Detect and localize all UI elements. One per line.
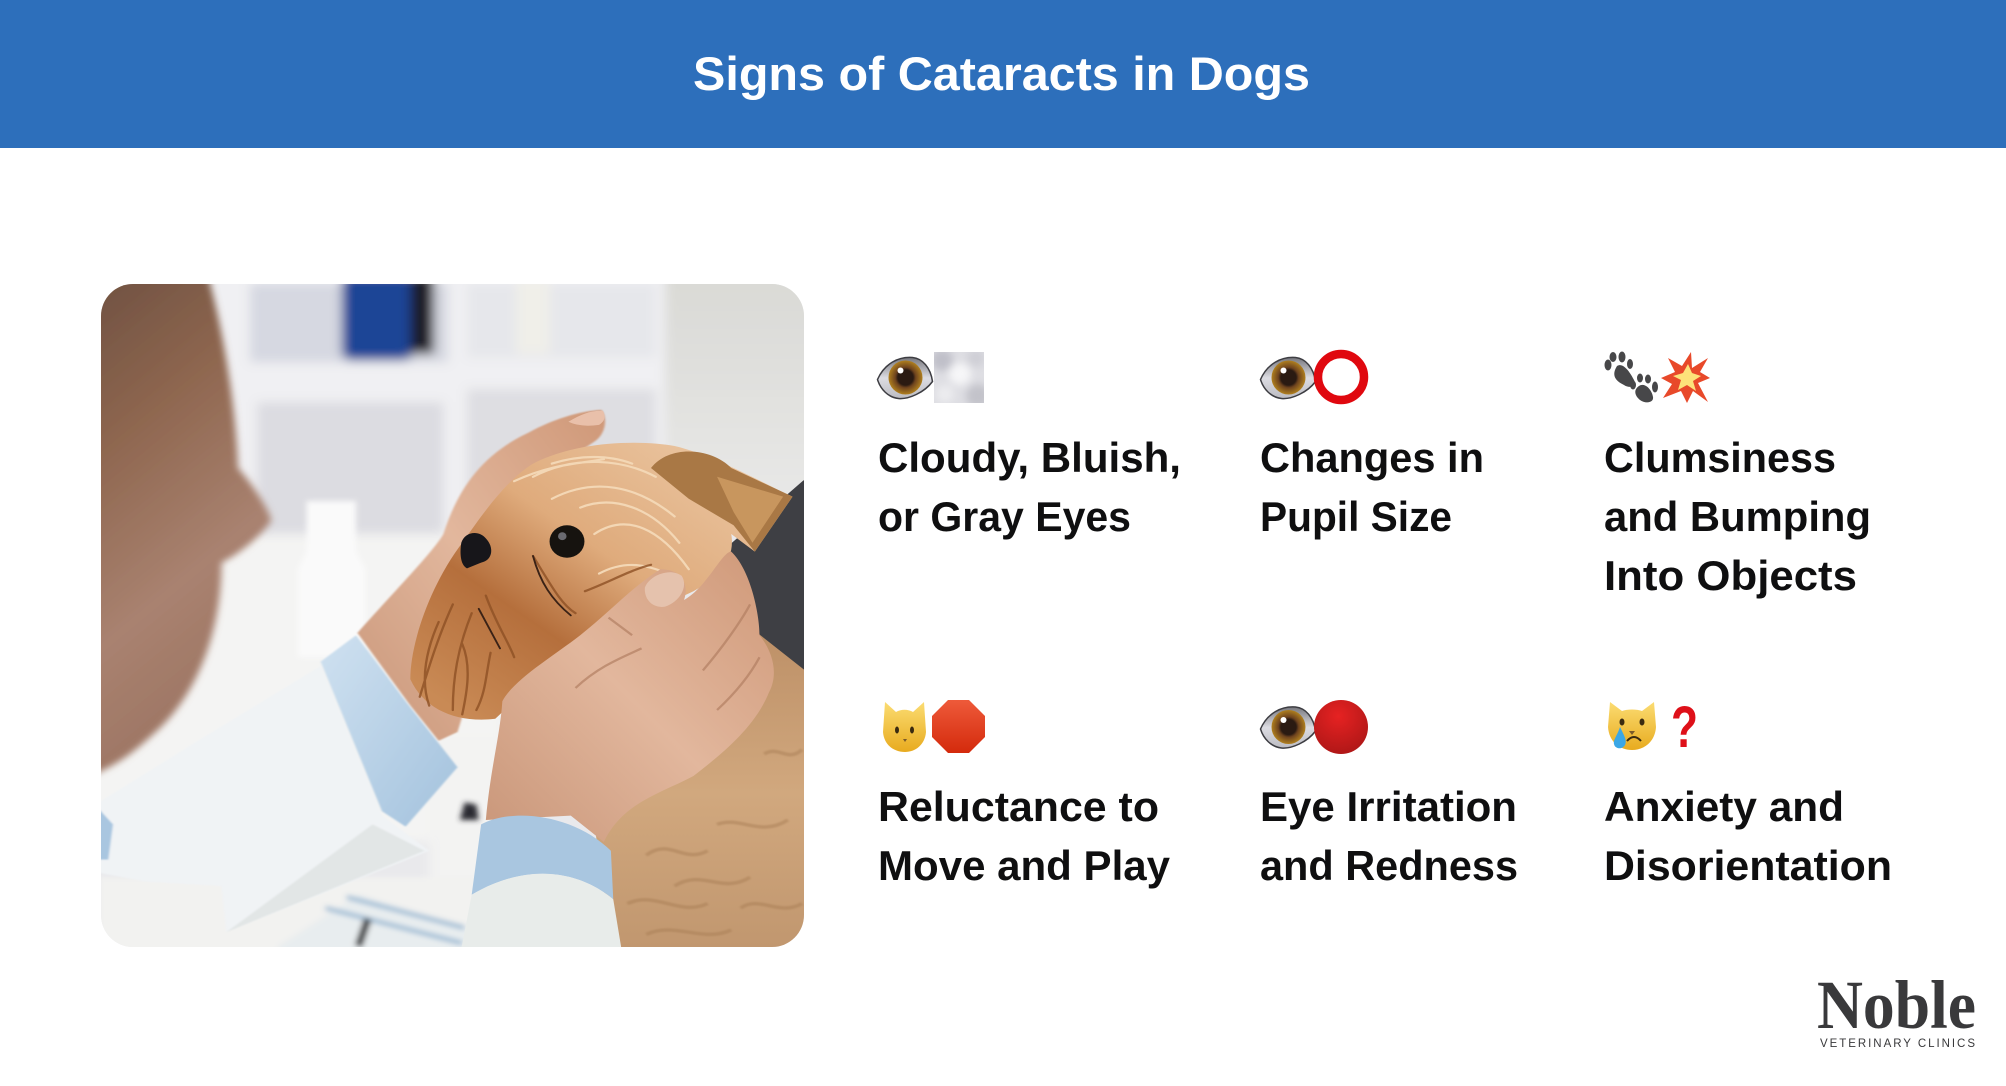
label: Pupil Size	[1260, 493, 1452, 540]
header banner	[0, 0, 2006, 148]
fur strands	[420, 457, 689, 714]
icon: paws and collision	[1604, 352, 1710, 403]
photo: vet examining a small dog's eyes	[80, 270, 826, 961]
blurred white bottle	[305, 500, 358, 542]
label: Reluctance to	[878, 783, 1159, 830]
white coat sleeve	[101, 810, 416, 930]
label: Into Objects	[1604, 552, 1857, 599]
label: Eye Irritation	[1260, 783, 1517, 830]
logo: Noble Veterinary Clinics: VETERINARY CLINICS	[1820, 1038, 1975, 1050]
icon: crying cat and question mark	[1608, 695, 1698, 760]
sign 3: clumsiness	[1604, 352, 1871, 599]
sign 5: eye irritation	[1260, 700, 1518, 889]
logo: Noble Veterinary Clinics: Noble	[1817, 967, 1976, 1043]
label: Clumsiness	[1604, 434, 1836, 481]
label: Disorientation	[1604, 842, 1892, 889]
left hand on dog's head	[357, 410, 605, 741]
label: Anxiety and	[1604, 783, 1844, 830]
icon: eye and ring	[1260, 354, 1364, 400]
sign 2: pupil size	[1260, 354, 1484, 540]
label	[1260, 434, 1484, 540]
label: Changes in	[1260, 434, 1484, 481]
sign 4: reluctance to move	[878, 700, 1171, 889]
icon: cat and stop sign	[883, 700, 985, 753]
label: and Bumping	[1604, 493, 1871, 540]
dog nose	[461, 533, 491, 568]
blue cuff right	[472, 816, 613, 899]
label: or Gray Eyes	[878, 493, 1131, 540]
dark fur behind the dog	[730, 480, 804, 670]
dog ear	[651, 451, 793, 552]
title: Signs of Cataracts in Dogs	[693, 47, 1310, 100]
label	[1260, 783, 1518, 889]
blurred shelving background	[101, 284, 804, 874]
label: and Redness	[1260, 842, 1518, 889]
sign 1: cloudy eyes	[878, 349, 1181, 540]
label	[878, 434, 1181, 540]
label	[1604, 434, 1871, 599]
icon: crying cat and question mark: ?	[1671, 695, 1698, 760]
blurred vet head	[89, 274, 271, 776]
dog eye	[550, 525, 584, 558]
white sleeve right	[462, 874, 622, 947]
label: Cloudy, Bluish,	[878, 434, 1181, 481]
blue cuff left	[321, 635, 458, 827]
label	[878, 783, 1171, 889]
icon: eye and cloud	[876, 352, 984, 403]
right hand cradling dog	[486, 552, 774, 842]
label	[1604, 783, 1892, 889]
dog head	[410, 443, 793, 720]
table and paper	[104, 798, 483, 947]
dog body fur	[594, 631, 816, 956]
sign 6: anxiety	[1604, 695, 1892, 889]
label: Move and Play	[878, 842, 1171, 889]
icon: eye and red circle	[1260, 700, 1368, 754]
